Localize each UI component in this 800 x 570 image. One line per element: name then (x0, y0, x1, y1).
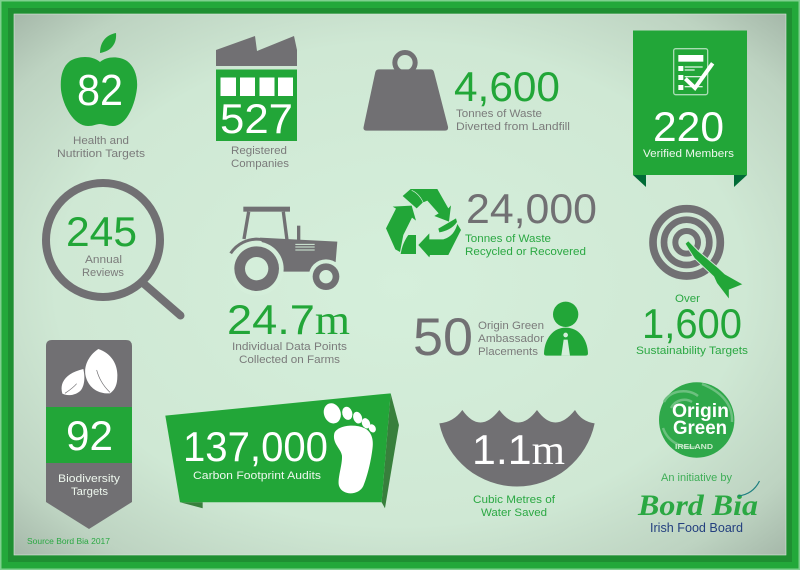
label: water saved: Cubic Metres of (473, 494, 556, 506)
stat: registered companies (216, 36, 297, 170)
number: 24.7m: 24.7m (227, 296, 350, 344)
label: ambassador placements: Ambassador (478, 333, 544, 345)
label: annual reviews: Reviews (82, 267, 124, 279)
label: water saved: Water Saved (481, 507, 547, 519)
icon: footprint (321, 401, 377, 493)
number: 245: 245 (66, 208, 137, 255)
label: waste recycled: Recycled or Recovered (465, 246, 586, 258)
stat: annual reviews (46, 183, 180, 316)
icon: water bowl (439, 410, 595, 486)
stat: cubic metres of water saved (439, 410, 595, 519)
label: waste recycled: Tonnes of Waste (465, 233, 551, 245)
label: water saved (473, 494, 556, 519)
number: 220: 220 (653, 103, 724, 150)
text: an initiative by: An initiative by (661, 472, 732, 484)
label: waste diverted: Diverted from Landfill (456, 121, 570, 133)
stat: verified members ribbon (633, 30, 747, 187)
label: verified members: Verified Members (643, 148, 735, 160)
source note: Source Bord Bia 2017 (27, 537, 111, 546)
label: data points (232, 341, 348, 366)
label: ambassador placements (478, 320, 544, 358)
number: 24,000: 24,000 (466, 185, 597, 232)
logo: origin green ireland: IRELAND (675, 442, 714, 451)
label: data points: Collected on Farms (239, 354, 341, 366)
logo: bord bia: Irish Food Board (650, 520, 743, 535)
number: 4,600: 4,600 (454, 63, 560, 110)
label: biodiversity targets: Targets (71, 486, 109, 498)
icon: magnifying glass (46, 183, 180, 316)
logo: bord bia: Bord Bia (637, 489, 758, 522)
label: annual reviews: Annual (85, 254, 122, 266)
label: ambassador placements: Origin Green (478, 320, 544, 332)
number: 1,600: 1,600 (642, 300, 742, 347)
label: over: Over (675, 293, 700, 305)
number: 527: 527 (220, 95, 293, 142)
label: biodiversity targets (58, 473, 121, 498)
icon: target with dart (653, 209, 743, 300)
logo: origin green ireland: Origin (672, 401, 729, 422)
number: 1.1m: 1.1m (472, 426, 565, 474)
icon: apple (61, 33, 137, 126)
icon: weight (363, 52, 448, 131)
icon: checklist (674, 49, 713, 95)
number: 92: 92 (66, 412, 113, 459)
stat: tonnes of waste recycled (386, 185, 597, 258)
icon: recycling arrows (386, 189, 461, 257)
ribbon panel (633, 30, 747, 187)
label: waste recycled (465, 233, 586, 258)
label: sustainability targets: Sustainability Targets (636, 345, 749, 357)
icon: factory (216, 36, 297, 141)
icon: person with tie (544, 302, 588, 356)
logo: origin green ireland: Green (673, 418, 727, 439)
stat: data points (227, 207, 350, 366)
stat: tonnes of waste diverted from landfill (363, 52, 570, 133)
label: data points: Individual Data Points (232, 341, 348, 353)
icon: leaves (62, 349, 117, 395)
label: carbon footprint audits: Carbon Footprint Audits (193, 470, 322, 482)
label: registered companies: Companies (231, 158, 290, 170)
ribbon banner (165, 393, 399, 508)
label: health and nutrition targets: Health and (73, 135, 129, 147)
label: registered companies (231, 145, 290, 170)
label: registered companies: Registered (231, 145, 287, 157)
number: 82: 82 (77, 66, 123, 115)
label: waste diverted: Tonnes of Waste (456, 108, 542, 120)
icon: tractor (230, 207, 343, 296)
label: annual reviews (82, 254, 124, 279)
stat: carbon footprint audits (165, 393, 399, 508)
stat: ambassador placements (413, 302, 588, 367)
stat: biodiversity targets (46, 340, 132, 529)
stat: health and nutrition targets (57, 33, 146, 160)
number: 50: 50 (413, 308, 473, 367)
label: health and nutrition targets (57, 135, 146, 160)
label: ambassador placements: Placements (478, 346, 539, 358)
label: biodiversity targets: Biodiversity (58, 473, 121, 485)
stat: sustainability targets (636, 209, 749, 357)
number: 137,000: 137,000 (183, 423, 328, 470)
label: waste diverted (456, 108, 570, 133)
label: health and nutrition targets: Nutrition Targets (57, 148, 146, 160)
logo: bord bia (637, 481, 760, 535)
shield panel (46, 340, 132, 529)
logo: origin green ireland (659, 382, 734, 458)
